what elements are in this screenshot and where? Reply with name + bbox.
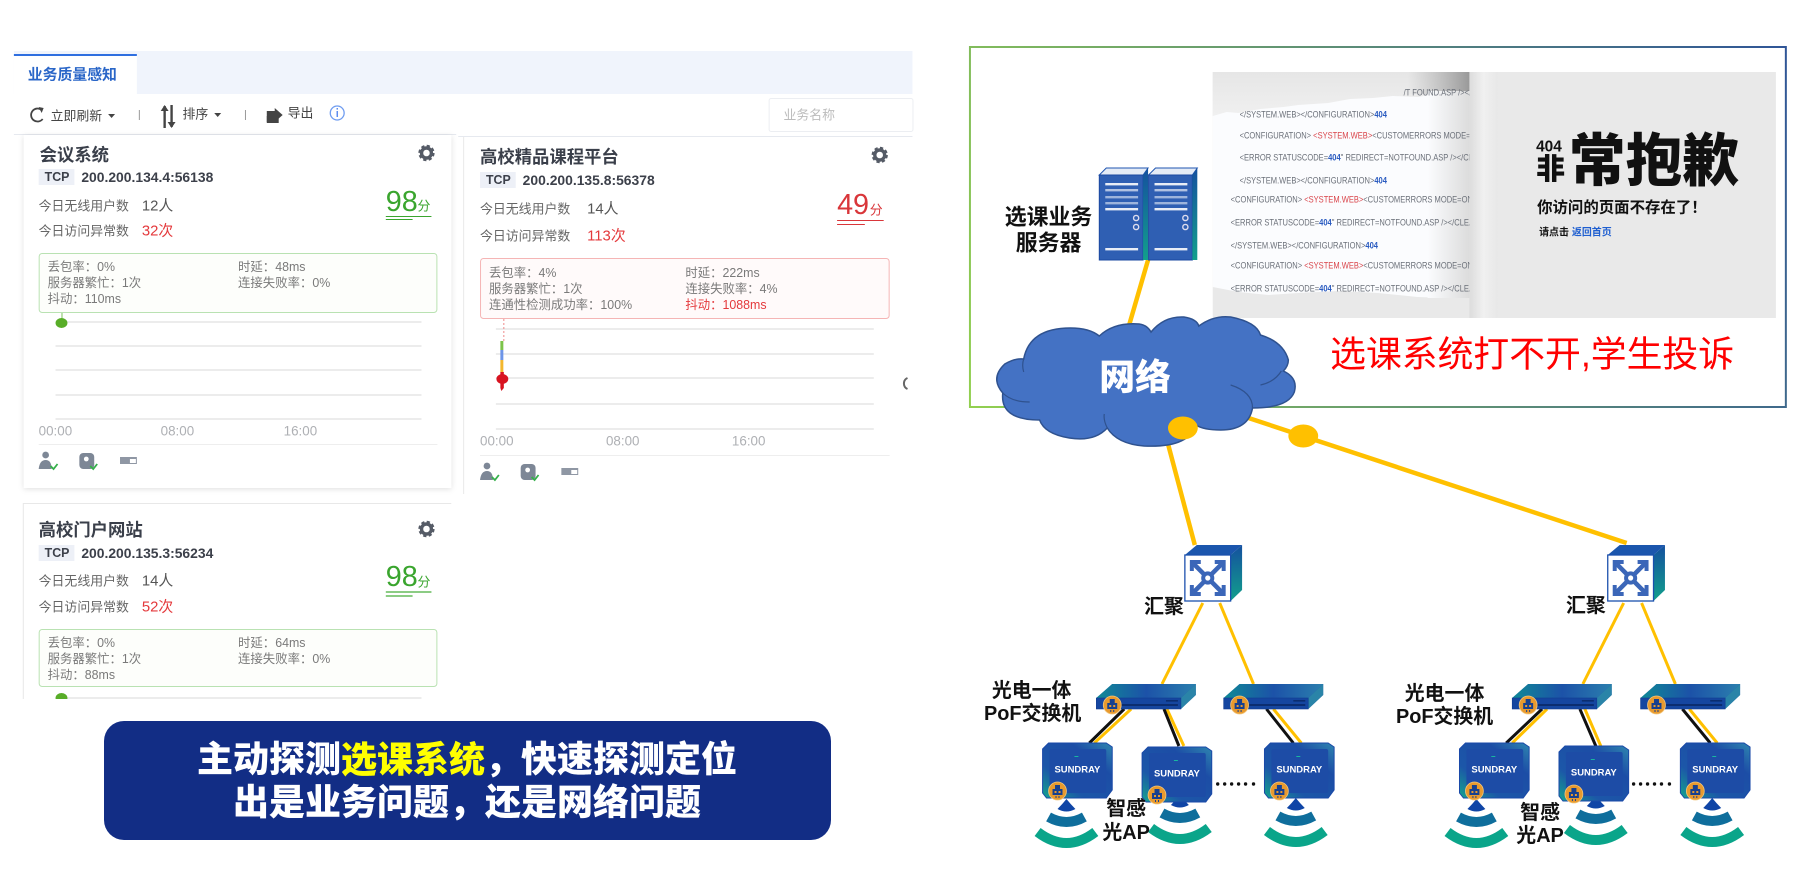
card: 高校精品课程平台: 高校精品课程平台	[480, 147, 619, 167]
card: 高校门户网站	[22, 503, 452, 699]
404 message: 非	[1536, 154, 1565, 186]
toolbar	[14, 98, 913, 137]
label: course server: 服务器	[1016, 230, 1081, 256]
status box: 连通性检测成功率：100%	[489, 297, 632, 312]
icon: network cloud	[997, 317, 1295, 446]
status icons	[480, 463, 578, 480]
icon: access points: SUNDRAY	[1154, 768, 1201, 780]
status box: 服务器繁忙：1次	[489, 281, 583, 296]
card: 高校门户网站: 高校门户网站	[39, 520, 143, 540]
card: 高校精品课程平台: 200.200.135.8:56378	[523, 172, 655, 188]
card: 高校精品课程平台: 113次	[587, 227, 626, 245]
score: 49	[837, 189, 869, 221]
status box: 连接失败率：0%	[238, 651, 330, 666]
icon: wifi signals	[1038, 795, 1741, 843]
404 message: 请点击	[1539, 225, 1569, 239]
card: 会议系统: 12人	[142, 197, 173, 215]
icon: course server	[1099, 168, 1197, 260]
code text: <CONFIGURATION> <SYSTEM.WEB><CUSTOMERRORS MODE=ON	[1231, 193, 1473, 205]
status box: 抖动：1088ms	[685, 298, 767, 312]
code text: </SYSTEM.WEB></CONFIGURATION>404	[1240, 174, 1387, 186]
panel: business quality dashboard	[14, 51, 913, 724]
label: PoF switch right: PoF交换机	[1396, 704, 1493, 728]
card: 会议系统: TCP	[45, 170, 69, 184]
status box: 连接失败率：0%	[238, 275, 330, 290]
score	[386, 566, 432, 597]
code text: <ERROR STATUSCODE=404" REDIRECT=NOTFOUND.ASP /></CLEAR	[1231, 216, 1479, 228]
code text: </SYSTEM.WEB></CONFIGURATION>404	[1240, 108, 1387, 120]
card: 高校门户网站: TCP	[45, 546, 69, 560]
label: smart AP right: 智感	[1520, 801, 1560, 824]
icon: access points	[1043, 743, 1750, 804]
torn paper	[1213, 91, 1469, 298]
status icons	[39, 452, 137, 469]
code text: <CONFIGURATION> <SYSTEM.WEB><CUSTOMERRORS MODE=ON	[1240, 129, 1482, 141]
toolbar: 导出	[288, 105, 313, 121]
status box	[481, 258, 889, 318]
card: 高校门户网站: 14人	[142, 572, 173, 590]
404 message: 常抱歉	[1569, 130, 1739, 194]
panel: complaint frame	[970, 47, 1786, 407]
status box: 抖动：88ms	[48, 668, 115, 682]
callout banner	[104, 721, 831, 840]
line chart: 00:00	[39, 423, 72, 439]
card: 会议系统: 今日无线用户数	[39, 198, 129, 214]
icon: PoF switches	[1096, 684, 1740, 714]
score: 98	[386, 561, 418, 593]
label: smart AP left	[1102, 797, 1150, 844]
label: PoF switch left	[984, 679, 1081, 725]
icon: access points: SUNDRAY	[1276, 764, 1323, 776]
label: PoF switch left: PoF交换机	[984, 701, 1081, 725]
card: 高校精品课程平台: 14人	[587, 200, 619, 218]
label: aggregation right: 汇聚	[1566, 594, 1606, 617]
status box: 丢包率：0%	[48, 259, 115, 274]
status box: 时延：222ms	[685, 266, 760, 280]
label: smart AP left: 智感	[1106, 797, 1146, 820]
icon: aggregation switch right	[1608, 545, 1665, 601]
label: aggregation left: 汇聚	[1144, 595, 1184, 618]
line chart	[480, 319, 874, 449]
label: smart AP right: 光AP	[1516, 824, 1564, 847]
links: switch to AP	[1089, 709, 1717, 746]
toolbar: 业务名称	[784, 107, 835, 123]
tab strip	[14, 51, 912, 94]
card: 会议系统: 200.200.134.4:56138	[81, 169, 214, 185]
complaint text: 选课系统打不开,学生投诉	[1330, 333, 1734, 375]
status box: 时延：64ms	[238, 636, 305, 650]
label: course server	[1005, 204, 1092, 256]
code text: </SYSTEM.WEB></CONFIGURATION>404	[1231, 239, 1378, 251]
panel: 404 error page screenshot	[1213, 72, 1776, 318]
link node	[1288, 424, 1318, 448]
card: 高校门户网站: 52次	[142, 598, 173, 616]
line chart: 16:00	[284, 423, 317, 439]
panel: network topology	[970, 47, 1786, 847]
label: PoF switch left: 光电一体	[992, 679, 1071, 702]
line chart: 08:00	[606, 433, 639, 449]
score	[837, 189, 884, 225]
card: 高校精品课程平台: TCP	[486, 173, 511, 187]
icon: access points: SUNDRAY	[1692, 764, 1739, 776]
status box: 连接失败率：4%	[685, 281, 778, 296]
code text: <ERROR STATUSCODE=404" REDIRECT=NOTFOUND.ASP /></CLEAR	[1240, 151, 1488, 163]
line chart: 00:00	[480, 433, 514, 449]
label: course server: 选课业务	[1005, 204, 1092, 230]
tab strip: 业务质量感知	[28, 65, 117, 84]
label: PoF switch right	[1396, 682, 1493, 728]
score	[386, 186, 431, 220]
toolbar: 立即刷新	[51, 108, 102, 124]
status box: 服务器繁忙：1次	[48, 275, 141, 290]
card: 高校精品课程平台: 今日访问异常数	[480, 228, 570, 244]
score: 98	[386, 186, 418, 218]
ellipsis dots	[1216, 782, 1671, 786]
status box: 服务器繁忙：1次	[48, 651, 141, 666]
404 message: 返回首页	[1572, 225, 1612, 239]
card: 会议系统: 今日访问异常数	[39, 223, 129, 239]
status box: 时延：48ms	[238, 260, 305, 274]
label: smart AP right	[1516, 801, 1564, 847]
card: 会议系统: 32次	[142, 222, 173, 240]
score: 分	[418, 574, 430, 590]
card: 会议系统: 会议系统	[40, 145, 109, 165]
card: 高校门户网站: 今日无线用户数	[39, 573, 129, 589]
links: network backbone	[1129, 260, 1675, 684]
code text: <CONFIGURATION> <SYSTEM.WEB><CUSTOMERRORS MODE=ON	[1231, 259, 1473, 271]
icon: access points: SUNDRAY	[1471, 764, 1518, 776]
card: 会议系统	[24, 135, 451, 488]
score: 分	[418, 198, 430, 214]
status box: 抖动：110ms	[48, 292, 121, 306]
icon: access points: SUNDRAY	[1571, 767, 1617, 779]
code text: /T FOUND.ASP /></CL	[1404, 86, 1481, 98]
status box: 丢包率：4%	[489, 265, 556, 280]
callout banner: 出是业务问题，还是网络问题	[233, 782, 701, 822]
404 message	[1536, 130, 1739, 239]
icon: network cloud: 网络	[1099, 356, 1171, 398]
404 message: 404	[1536, 138, 1562, 156]
line chart	[39, 313, 422, 439]
code text: <ERROR STATUSCODE=404" REDIRECT=NOTFOUND.ASP /></CLEAR	[1231, 282, 1479, 294]
label: smart AP left: 光AP	[1102, 821, 1150, 844]
status box: 丢包率：0%	[48, 635, 115, 650]
status box	[39, 254, 437, 312]
label: PoF switch right: 光电一体	[1405, 682, 1484, 705]
card: 高校门户网站: 今日访问异常数	[39, 599, 129, 615]
callout banner: 主动探测选课系统，快速探测定位	[197, 738, 737, 780]
card: 高校精品课程平台	[463, 137, 907, 494]
card: 高校精品课程平台: 今日无线用户数	[480, 201, 570, 217]
icon: access points: SUNDRAY	[1054, 764, 1101, 776]
link node	[1168, 416, 1198, 440]
line chart: 16:00	[732, 433, 765, 449]
toolbar: 排序	[182, 106, 208, 122]
line chart: 08:00	[161, 423, 194, 439]
card: 高校门户网站: 200.200.135.3:56234	[81, 545, 214, 561]
status box	[39, 630, 437, 686]
code text	[1231, 86, 1488, 294]
icon: aggregation switch left	[1185, 545, 1242, 601]
404 message: 你访问的页面不存在了！	[1537, 197, 1707, 217]
score: 分	[870, 202, 883, 218]
